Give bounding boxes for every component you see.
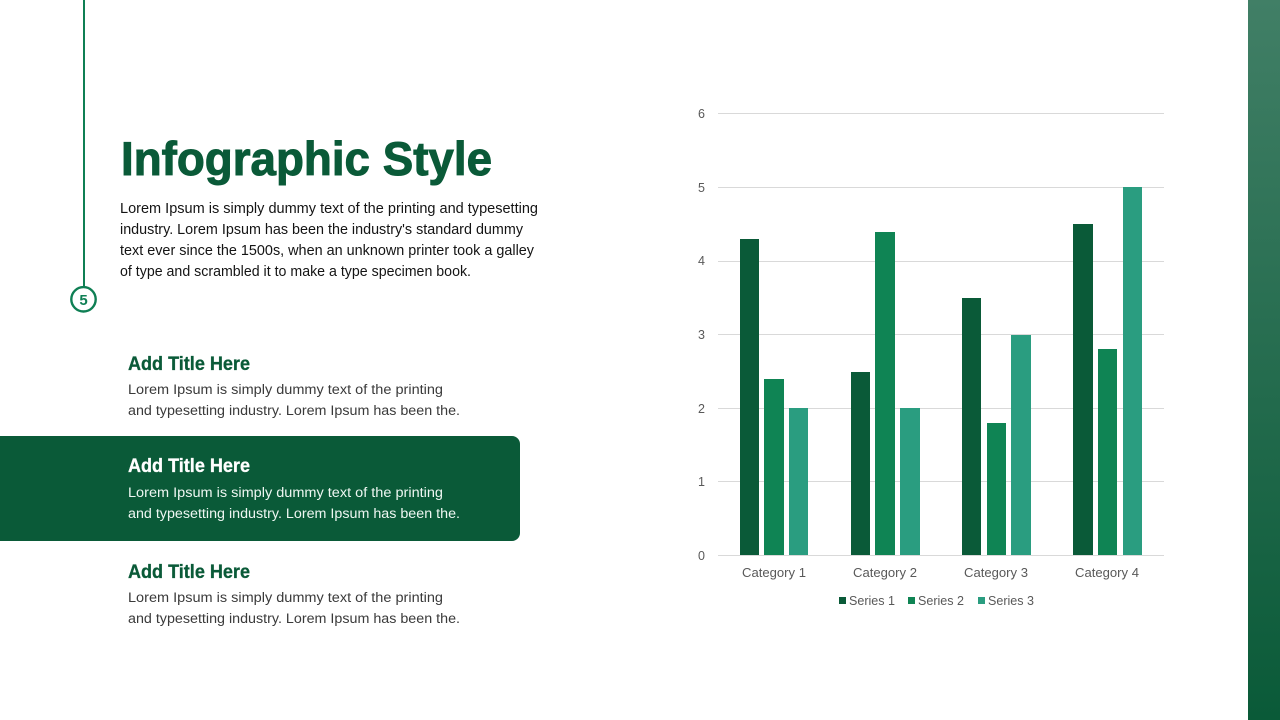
series 1 bars (740, 224, 1093, 555)
list item 3 (128, 562, 460, 627)
list item 1: Lorem Ipsum is simply dummy text of the printing (128, 382, 443, 398)
intro text block: of type and scrambled it to make a type specimen book. (120, 264, 471, 280)
list item 1: Add Title Here (128, 354, 250, 375)
list item 2 highlighted panel: and typesetting industry. Lorem Ipsum has been the. (128, 506, 460, 522)
series 3 bars (789, 187, 1142, 555)
y axis labels: 3 (698, 328, 705, 342)
list item 3: and typesetting industry. Lorem Ipsum has been the. (128, 611, 460, 627)
list item 3: Lorem Ipsum is simply dummy text of the printing (128, 590, 443, 606)
intro text block: Lorem Ipsum is simply dummy text of the printing and typesetting (120, 201, 538, 217)
slide number marker: 5 (79, 292, 88, 309)
legend: Series 2 (918, 594, 964, 608)
category labels (742, 566, 1139, 580)
list item 2 highlighted panel (0, 436, 520, 541)
right gradient sidebar (1248, 0, 1280, 720)
series 2 bars (764, 232, 1117, 555)
y axis labels: 6 (698, 107, 705, 121)
legend: Series 3 (988, 594, 1034, 608)
list item 1 (128, 354, 460, 419)
category labels: Category 1 (742, 566, 806, 580)
category labels: Category 2 (853, 566, 917, 580)
slide number marker (71, 0, 96, 311)
intro text block: industry. Lorem Ipsum has been the industry's standard dummy (120, 222, 524, 238)
y axis labels (698, 107, 705, 563)
list item 2 highlighted panel: Lorem Ipsum is simply dummy text of the printing (128, 485, 443, 501)
legend (839, 594, 1034, 608)
list item 3: Add Title Here (128, 562, 250, 583)
legend: Series 1 (849, 594, 895, 608)
y axis labels: 5 (698, 181, 705, 195)
y axis labels: 4 (698, 254, 705, 268)
list item 2 highlighted panel: Add Title Here (128, 456, 250, 477)
category labels: Category 3 (964, 566, 1028, 580)
intro text block: text ever since the 1500s, when an unknown printer took a galley (120, 243, 535, 259)
bar chart (698, 107, 1164, 608)
list item 1: and typesetting industry. Lorem Ipsum has been the. (128, 403, 460, 419)
y axis labels: 1 (698, 475, 705, 489)
y axis labels: 2 (698, 402, 705, 416)
category labels: Category 4 (1075, 566, 1139, 580)
title: Infographic Style (121, 132, 492, 185)
y axis labels: 0 (698, 549, 705, 563)
intro text block (120, 201, 538, 280)
